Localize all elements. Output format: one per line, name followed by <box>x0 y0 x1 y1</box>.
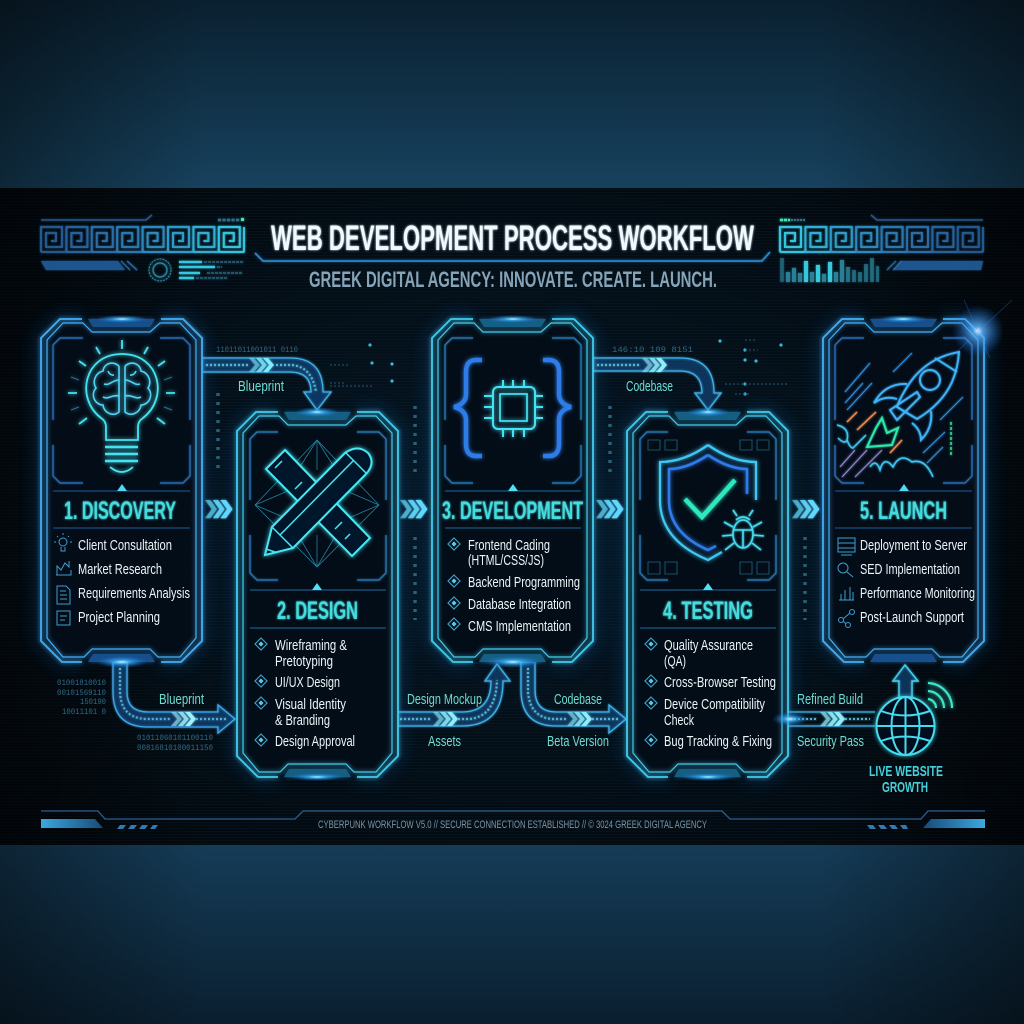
panel: 2 design <box>237 412 398 777</box>
list text: Bug Tracking & Fixing <box>664 734 772 750</box>
label: assets: Assets <box>428 734 461 750</box>
connector: refined build line <box>788 712 875 726</box>
list text: Frontend Cading <box>468 538 550 554</box>
wide glow behind cards <box>41 319 984 777</box>
image frame <box>250 432 386 580</box>
icon: code braces with chip <box>454 360 571 456</box>
icon: shield with check <box>660 445 756 560</box>
list text: (HTML/CSS/JS) <box>468 553 544 569</box>
label: blueprint top: Blueprint <box>238 379 284 395</box>
divider and pointer <box>53 484 190 528</box>
panel: 4 testing <box>627 412 788 777</box>
header: left greek key ornament <box>41 215 244 281</box>
decorative binary text and data dots <box>57 339 805 753</box>
label: refined build: Refined Build <box>797 692 863 708</box>
icon: rocket <box>837 352 963 477</box>
footer decoration <box>41 811 985 829</box>
panel: 1 discovery <box>41 319 202 662</box>
header: right greek key ornament and bar chart <box>780 215 983 282</box>
list text <box>468 538 580 635</box>
title underline <box>255 252 770 261</box>
connector: design mockup arrow <box>398 664 510 726</box>
image frame <box>445 338 581 483</box>
list text: Project Planning <box>78 610 160 626</box>
list bullets <box>645 638 657 746</box>
list text: Wireframing & <box>275 638 347 654</box>
connector: blueprint top arrow <box>202 358 331 410</box>
list text: Deployment to Server <box>860 538 967 554</box>
icon: lightbulb with brain <box>68 340 175 472</box>
heading: 3. DEVELOPMENT <box>442 497 583 525</box>
card frame <box>627 412 788 777</box>
title: WEB DEVELOPMENT PROCESS WORKFLOW <box>271 219 754 258</box>
decorative binary text and data dots: 11011011001011 0110 <box>216 345 298 355</box>
panel: 5 launch <box>823 319 984 662</box>
heading: 5. LAUNCH <box>860 497 947 525</box>
list text: Pretotyping <box>275 654 333 670</box>
label: codebase top: Codebase <box>626 379 673 395</box>
decorative binary text and data dots: 01011060101100110 <box>137 733 213 743</box>
list text <box>275 638 355 750</box>
footer text: CYBERPUNK WORKFLOW V5.0 // SECURE CONNECTION ESTABLISHED // © 3024 GREEK DIGITAL AGENCY <box>318 819 707 831</box>
connector: blueprint lower arrow <box>113 662 235 733</box>
lens flare <box>900 300 1024 360</box>
card body <box>237 412 398 777</box>
heading: 1. DISCOVERY <box>64 497 176 525</box>
card body <box>627 412 788 777</box>
label: design mockup: Design Mockup <box>407 692 482 708</box>
list text: Post-Launch Support <box>860 610 964 626</box>
list text: Visual Identity <box>275 697 347 713</box>
heading: 4. TESTING <box>663 597 753 625</box>
list text: (QA) <box>664 654 686 670</box>
list text: Market Research <box>78 562 162 578</box>
divider and pointer <box>445 484 581 528</box>
decorative binary text and data dots: 10011101 0 <box>62 707 106 717</box>
list text: CMS Implementation <box>468 619 571 635</box>
card frame <box>823 319 984 662</box>
icon: up arrow to launch <box>893 665 918 700</box>
subtitle: GREEK DIGITAL AGENCY: INNOVATE. CREATE. LAUNCH. <box>309 267 717 292</box>
list text <box>78 538 190 626</box>
card frame <box>237 412 398 777</box>
decorative binary text and data dots: 00101569110 <box>57 688 106 698</box>
icon: geometry web <box>255 440 379 567</box>
label: live website growth: GROWTH <box>882 779 928 796</box>
list text: Requirements Analysis <box>78 586 190 602</box>
list text: Quality Assurance <box>664 638 753 654</box>
divider and pointer <box>640 583 776 628</box>
card frame <box>432 319 593 662</box>
list text: & Branding <box>275 713 330 729</box>
label: security pass: Security Pass <box>797 734 864 750</box>
list text: Device Compatibility <box>664 697 766 713</box>
label: blueprint lower: Blueprint <box>159 692 204 708</box>
label: live website growth: LIVE WEBSITE <box>869 763 943 780</box>
list text: Design Approval <box>275 734 355 750</box>
light hot spots on frames <box>96 315 929 781</box>
arrows between cards <box>205 500 820 518</box>
label: live website growth <box>869 763 943 796</box>
list icons <box>54 533 72 625</box>
panel: 3 development <box>432 319 593 662</box>
list text: Client Consultation <box>78 538 172 554</box>
icon: globe with signal <box>876 683 952 755</box>
list text: Cross-Browser Testing <box>664 675 776 691</box>
icon: bug <box>722 510 764 550</box>
card body <box>823 319 984 662</box>
decorative binary text and data dots: 01001810010 <box>57 678 106 688</box>
list text: Backend Programming <box>468 575 580 591</box>
list text: UI/UX Design <box>275 675 340 691</box>
list bullets <box>255 638 267 746</box>
decorative binary text and data dots: 146:10 109 8151 <box>612 345 693 355</box>
image frame <box>640 432 776 580</box>
list bullets <box>448 538 460 630</box>
list text <box>860 538 975 626</box>
icon: ruler and pencil <box>265 448 372 556</box>
card body <box>41 319 202 662</box>
decorative binary text and data dots: 150190 <box>80 697 106 707</box>
list text: Check <box>664 713 695 729</box>
list text: Database Integration <box>468 597 571 613</box>
list text <box>664 638 776 750</box>
list text: SED Implementation <box>860 562 960 578</box>
label: codebase lower: Codebase <box>554 692 602 708</box>
connector: codebase top arrow <box>593 358 721 410</box>
image frame <box>53 338 190 483</box>
heading: 2. DESIGN <box>277 597 358 625</box>
label: beta version: Beta Version <box>547 734 609 750</box>
image frame <box>835 338 972 483</box>
divider and pointer <box>250 583 386 628</box>
card body <box>432 319 593 662</box>
list icons <box>838 538 855 628</box>
divider and pointer <box>835 484 972 528</box>
decorative binary text and data dots: 00816810100011150 <box>137 743 213 753</box>
connector: codebase lower arrow <box>521 662 626 733</box>
key ornaments <box>648 440 769 574</box>
list text: Performance Monitoring <box>860 586 975 602</box>
card frame <box>41 319 202 662</box>
